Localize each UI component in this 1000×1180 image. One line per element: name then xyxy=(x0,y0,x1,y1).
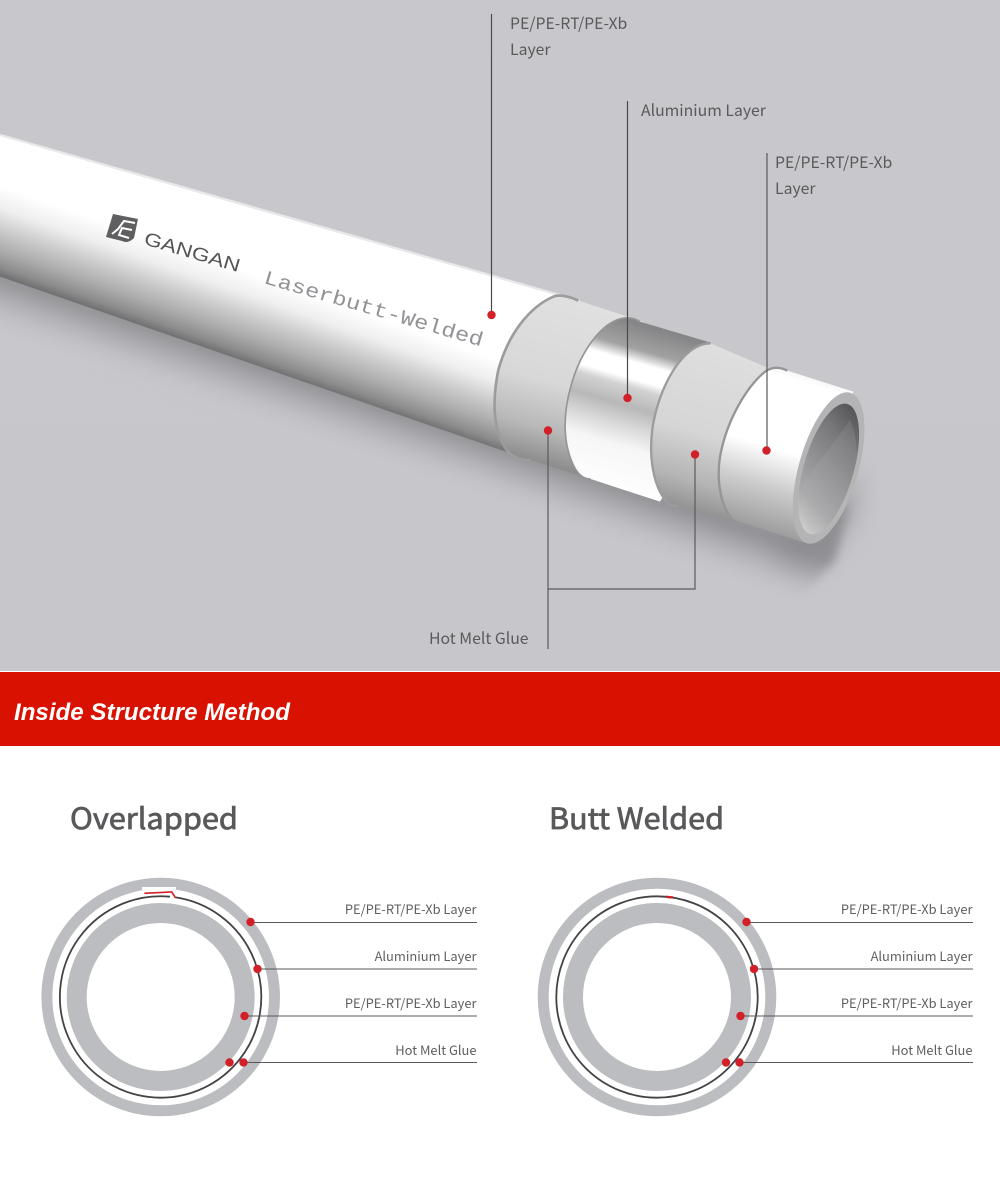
labels: Hot Melt Glue xyxy=(395,1040,476,1059)
aluminium layer xyxy=(565,318,713,502)
icon: logo mark xyxy=(106,214,138,242)
banner: Inside Structure Method xyxy=(0,672,1000,746)
callout: inner PE layer: Layer xyxy=(775,176,816,199)
callout: aluminium layer xyxy=(623,98,767,402)
pipe end opening xyxy=(779,385,879,551)
callout: inner PE layer: PE/PE-RT/PE-Xb xyxy=(775,150,892,173)
diagram: butt welded cross-section xyxy=(543,883,973,1111)
labels: PE/PE-RT/PE-Xb Layer xyxy=(841,993,973,1012)
overlap weld xyxy=(144,892,176,898)
labels xyxy=(841,899,973,1059)
labels: Aluminium Layer xyxy=(871,946,973,965)
labels: PE/PE-RT/PE-Xb Layer xyxy=(345,899,477,918)
pipe print: Laserbutt-Welded: Laserbutt-Welded xyxy=(261,268,485,353)
labels: Hot Melt Glue xyxy=(891,1040,972,1059)
callout dots and lines xyxy=(722,918,973,1067)
callout: hot melt glue xyxy=(429,426,699,649)
labels: PE/PE-RT/PE-Xb Layer xyxy=(841,899,973,918)
callout: outer PE layer: PE/PE-RT/PE-Xb xyxy=(510,11,627,34)
heading: Overlapped: Overlapped xyxy=(70,796,238,838)
callout: aluminium layer: Aluminium Layer xyxy=(641,98,767,121)
first hot melt glue layer xyxy=(495,296,647,480)
callout: inner PE layer xyxy=(762,150,892,455)
callout: outer PE layer: Layer xyxy=(510,37,551,60)
diagram: overlapped cross-section xyxy=(47,883,477,1111)
weld seam xyxy=(666,896,673,899)
banner: Inside Structure Method: Inside Structure Method xyxy=(14,699,291,726)
pipe shadow xyxy=(0,255,862,610)
labels: Aluminium Layer xyxy=(375,946,477,965)
outer white layer xyxy=(0,133,580,467)
aluminium ring with overlap xyxy=(60,896,261,1098)
logo: GANGAN xyxy=(106,214,243,276)
callout: hot melt glue: Hot Melt Glue xyxy=(429,626,529,649)
labels xyxy=(345,899,477,1059)
illustration: layered pipe xyxy=(0,133,879,551)
callout: outer PE layer xyxy=(487,11,627,319)
second hot melt glue layer xyxy=(651,343,788,523)
top highlight edge xyxy=(0,133,573,299)
callout dots and lines xyxy=(225,918,477,1067)
heading: Butt Welded: Butt Welded xyxy=(549,796,724,838)
panel: pipe photo background xyxy=(0,0,1000,671)
inner white layer xyxy=(719,368,853,544)
wordmark: GANGAN xyxy=(142,228,243,276)
labels: PE/PE-RT/PE-Xb Layer xyxy=(345,993,477,1012)
